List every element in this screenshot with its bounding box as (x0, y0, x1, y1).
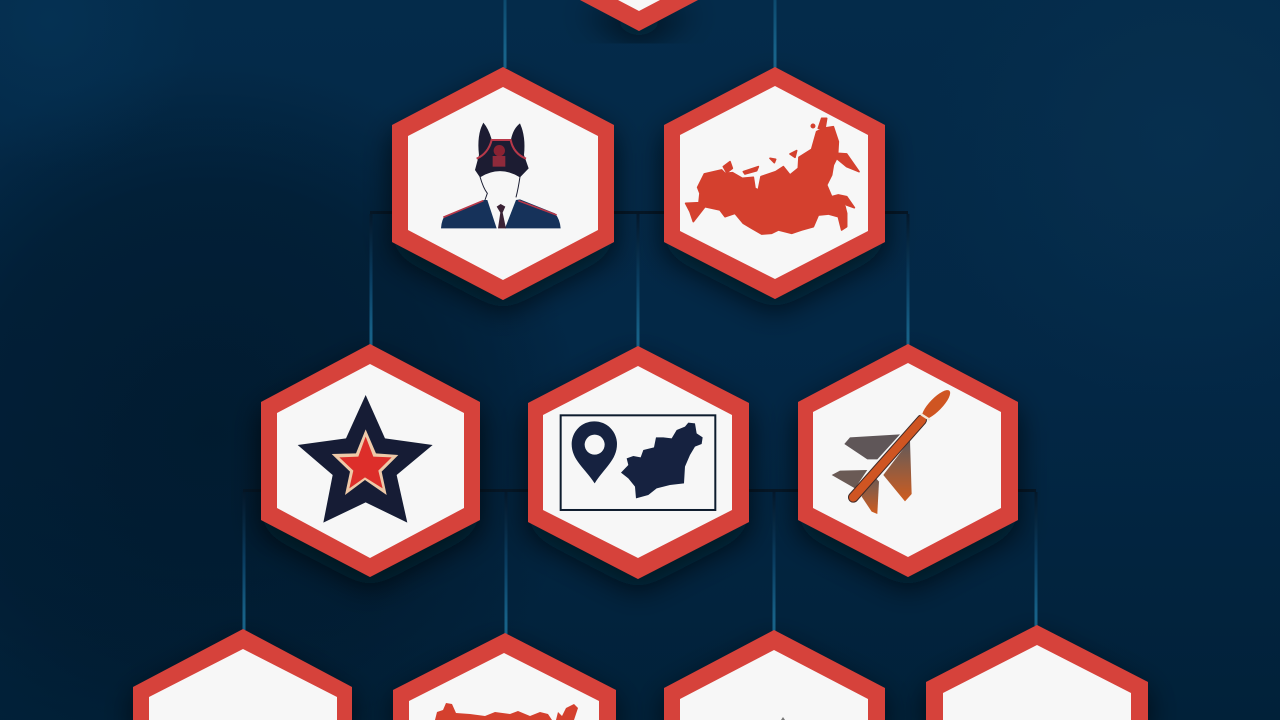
hexagon: location map icon (528, 346, 749, 579)
hexagon: star icon (261, 344, 480, 577)
hexagon: bottom row 4 (926, 625, 1148, 720)
hexagon: jet icon (798, 344, 1018, 577)
hexagon: officer icon (392, 67, 614, 300)
icon: location map (561, 415, 715, 510)
connector lines (242, 0, 1038, 634)
hexagon: bottom row 2 (393, 633, 616, 720)
hexagon: bottom row 3 (664, 630, 885, 720)
icon: Russia map partial (435, 703, 578, 720)
hexagon: Russia map icon (664, 67, 885, 299)
icon: star (298, 395, 433, 523)
icon: Russia map (686, 118, 859, 234)
icon: partial tip (781, 717, 785, 720)
icon: officer (441, 123, 561, 228)
hexagon: bottom row 1 (133, 629, 352, 720)
icon: jet (832, 386, 954, 514)
hexagon: top partial (580, 0, 698, 31)
